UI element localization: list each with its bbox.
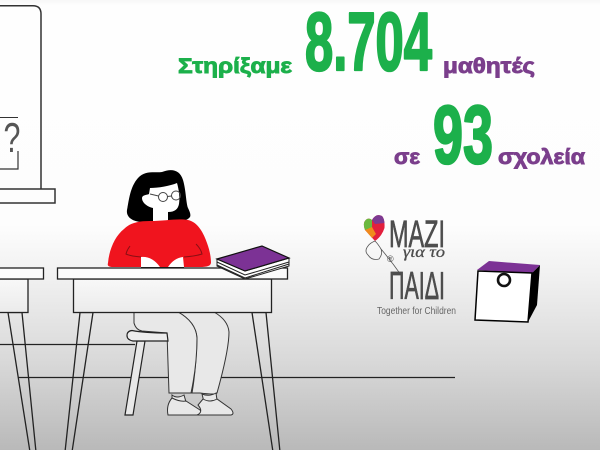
chair [125,330,168,415]
number: 93: 93 [433,90,493,181]
trousers and shoes [134,312,233,415]
label: μαθητές: μαθητές [443,54,535,78]
sleeve lines [126,244,202,257]
glasses [150,191,180,202]
headline line 1 [178,0,535,88]
logo: Mazi gia to paidi [364,214,456,317]
equation on board: ? [4,114,20,161]
icon: puzzle heart balloon [364,215,401,275]
registered mark: ® [387,254,394,264]
stack of books [217,246,289,279]
logo script: για το: για το [403,244,445,261]
red sweater [108,219,211,267]
neck and face [142,183,179,222]
hair [127,170,190,222]
label: Στηρίξαμε: Στηρίξαμε [178,54,292,78]
logo word: ΠΑΙΔΙ: ΠΑΙΔΙ [389,265,445,308]
logo word: ΜΑΖΙ: ΜΑΖΙ [389,214,445,256]
student [108,170,233,415]
headline line 2 [394,90,585,181]
label: σε: σε [394,145,420,169]
desk legs [65,312,280,450]
logo tagline: Together for Children [377,306,456,317]
label: σχολεία: σχολεία [498,145,585,169]
box ring [498,274,510,286]
floor lines [0,344,455,378]
donation box [475,261,540,322]
whiteboard [0,6,55,203]
hands and open book [141,257,184,267]
main desk [58,268,288,450]
left desk [0,268,44,450]
